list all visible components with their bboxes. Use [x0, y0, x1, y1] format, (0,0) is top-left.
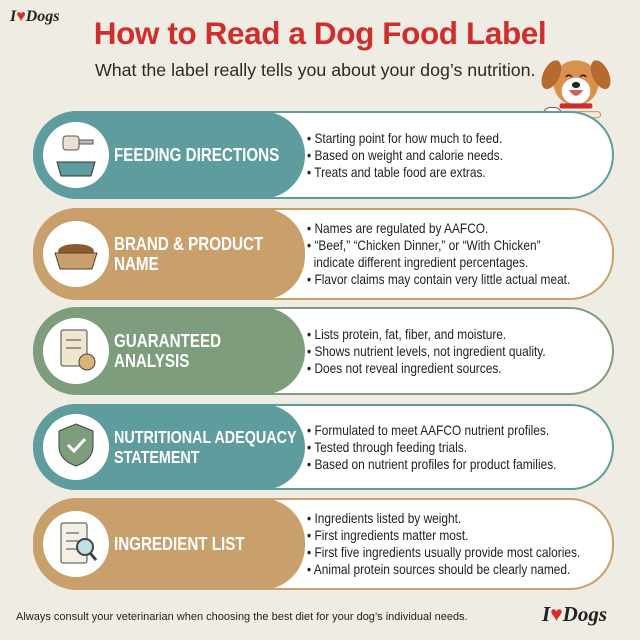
bullets — [307, 221, 570, 287]
bullets: • Based on weight and calorie needs. — [307, 148, 503, 162]
bullets: • Does not reveal ingredient sources. — [307, 360, 502, 376]
panel: guaranteed analysis — [33, 307, 614, 395]
bullets: • Shows nutrient levels, not ingredient quality. — [307, 344, 546, 358]
heading: GUARANTEED — [114, 330, 221, 351]
bullets — [307, 422, 556, 472]
heading: ANALYSIS — [114, 350, 189, 371]
heading: INGREDIENT LIST — [114, 533, 245, 554]
bullets: • Formulated to meet AAFCO nutrient profiles. — [307, 422, 549, 438]
icon: list with magnifier — [43, 511, 109, 577]
bullets: • Names are regulated by AAFCO. — [307, 221, 488, 236]
bullets — [307, 326, 546, 376]
icon: food bowl — [43, 221, 109, 287]
bullets: • Animal protein sources should be clearly named. — [307, 562, 570, 577]
icon: clipboard — [43, 318, 109, 384]
bullets: • Lists protein, fat, fiber, and moisture. — [307, 326, 506, 342]
bullets — [307, 130, 503, 180]
panel: feeding directions — [33, 111, 614, 199]
bullets: • First ingredients matter most. — [307, 528, 468, 543]
bullets: • Based on nutrient profiles for product families. — [307, 456, 556, 472]
bullets: • Treats and table food are extras. — [307, 164, 486, 180]
heading — [114, 233, 263, 274]
logo bottom: I♥Dogs — [542, 602, 607, 626]
panel: nutritional adequacy — [33, 404, 614, 490]
panel: ingredient list — [33, 498, 614, 590]
heading: FEEDING DIRECTIONS — [114, 144, 279, 165]
heading: STATEMENT — [114, 447, 200, 467]
bullets: • Starting point for how much to feed. — [307, 130, 502, 146]
bullets: • Ingredients listed by weight. — [307, 511, 461, 526]
heading — [114, 330, 221, 371]
bullets: • Flavor claims may contain very little actual meat. — [307, 272, 570, 287]
icon: dog mascot — [542, 60, 610, 118]
icon: scoop and bowl — [43, 122, 109, 188]
bullets: indicate different ingredient percentages. — [314, 255, 528, 270]
icon: shield — [43, 414, 109, 480]
heading: NUTRITIONAL ADEQUACY — [114, 427, 297, 447]
heading — [114, 427, 297, 467]
heading: NAME — [114, 253, 159, 274]
bullets — [307, 511, 580, 577]
footer note: Always consult your veterinarian when choosing the best diet for your dog’s individual needs. — [16, 611, 468, 623]
bullets: • First five ingredients usually provide most calories. — [307, 545, 580, 560]
logo top: I♥Dogs — [10, 8, 60, 25]
title: How to Read a Dog Food Label — [94, 15, 546, 51]
bullets: • “Beef,” “Chicken Dinner,” or “With Chicken” — [307, 238, 541, 253]
bullets: • Tested through feeding trials. — [307, 440, 467, 454]
heading: BRAND & PRODUCT — [114, 233, 263, 254]
panel: brand & product name — [33, 208, 614, 300]
subtitle: What the label really tells you about your dog’s nutrition. — [95, 60, 536, 80]
